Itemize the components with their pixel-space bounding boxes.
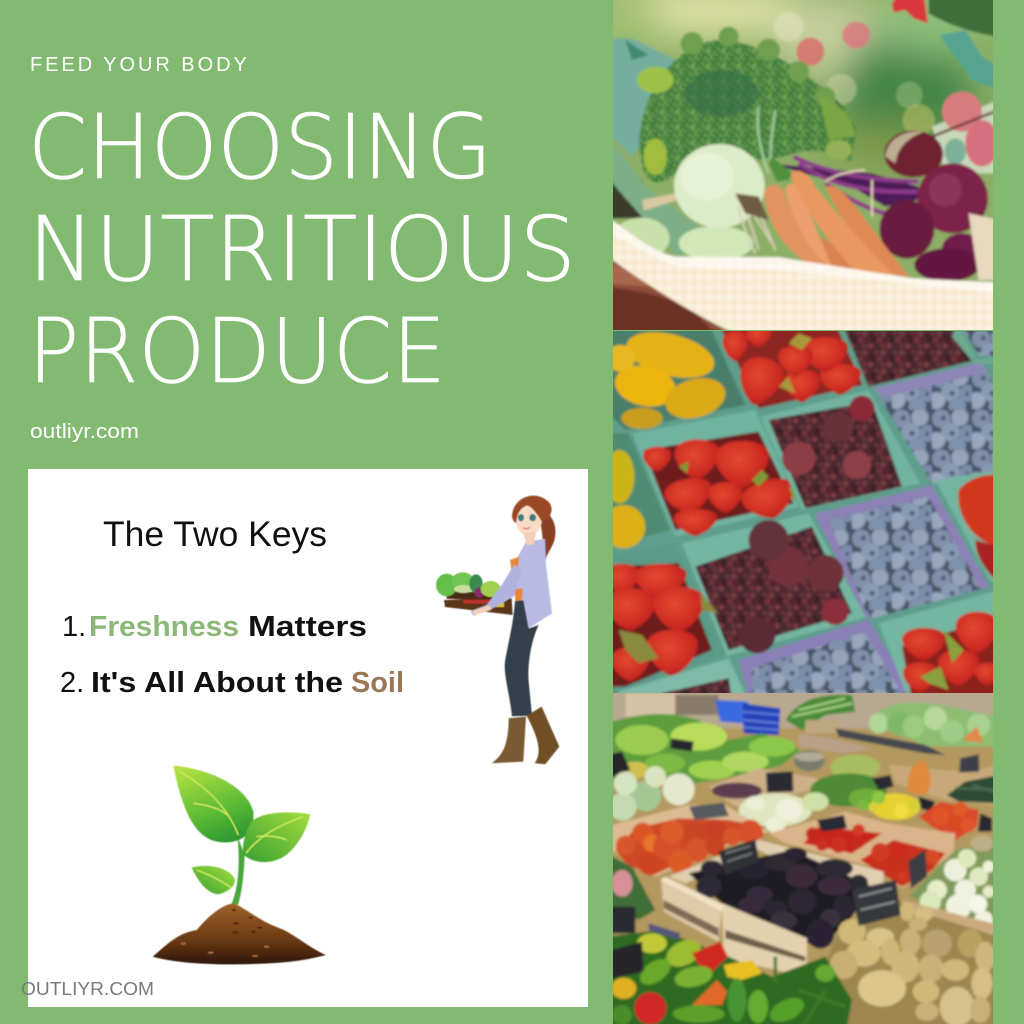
right crates — [889, 765, 999, 807]
carrot stems — [769, 157, 792, 182]
fennel white — [739, 793, 812, 827]
title: CHOOSING — [28, 95, 492, 199]
basket: blackberries top — [844, 331, 972, 388]
cauliflowers — [663, 773, 695, 805]
list item 1: 1. — [62, 611, 86, 643]
radishes and left greens — [605, 853, 655, 920]
soil mound — [153, 903, 326, 964]
lettuce — [605, 714, 800, 783]
back shelf and signs — [835, 728, 945, 755]
apples — [932, 100, 999, 173]
peppers — [605, 930, 852, 1024]
top-right foliage — [929, 0, 999, 37]
photo: baskets of berries — [613, 331, 993, 693]
photo: market stall — [613, 693, 993, 1024]
onion — [674, 144, 765, 228]
cabbages back — [869, 702, 999, 747]
chalk signs: right — [959, 754, 979, 773]
icon: woman carrying vegetable crate — [436, 496, 559, 764]
basket: bottom teal — [618, 658, 746, 693]
crates mid back — [709, 768, 819, 807]
back wall — [613, 693, 993, 730]
beets — [884, 131, 943, 177]
icon: seedling in soil — [153, 766, 326, 964]
pumpkin — [907, 760, 930, 794]
carrot tops foliage — [639, 40, 856, 182]
basket: blackberries bottom — [682, 513, 866, 656]
basket: strawberry right — [936, 470, 993, 582]
chalk sign: lettuce — [670, 738, 694, 752]
tomato crate left — [605, 805, 769, 877]
wood tray — [613, 259, 728, 330]
onion roots — [735, 197, 775, 253]
list item 2: 2. — [60, 667, 84, 699]
sign: potato — [852, 880, 901, 926]
cucumbers — [947, 775, 999, 803]
basket: blueberries top right — [876, 372, 993, 485]
eggplants — [689, 850, 872, 943]
crate: eggplants rim — [669, 840, 884, 897]
beet stems — [769, 163, 919, 207]
potatoes — [825, 900, 999, 1024]
red tomato crate — [769, 812, 955, 888]
cloth — [613, 219, 993, 330]
title — [28, 95, 576, 403]
bottom onions — [619, 216, 672, 253]
sign: tall — [908, 849, 927, 888]
list item 2 — [60, 667, 404, 699]
basket: blackberries middle — [760, 390, 920, 510]
limes and lemons — [849, 788, 882, 808]
bowl — [794, 750, 825, 771]
leeks — [785, 695, 855, 730]
leaf: small — [192, 866, 235, 894]
grapes — [830, 755, 880, 780]
greens — [810, 773, 887, 807]
basket: blueberries bottom — [738, 618, 907, 693]
basket: yellow tomatoes — [613, 331, 746, 430]
list item 2: Soil — [351, 667, 404, 699]
list item 2: It's All About the — [91, 667, 343, 699]
title: PRODUCE — [28, 299, 446, 403]
panel heading: The Two Keys — [103, 515, 327, 554]
basket: yellow tomatoes left — [613, 433, 670, 537]
sign: peppers — [605, 942, 644, 980]
basket: strawberries middle — [632, 410, 799, 537]
leek leaves — [613, 37, 676, 157]
title: NUTRITIOUS — [28, 197, 576, 301]
blue baskets — [715, 700, 749, 723]
sign: grey — [689, 803, 729, 820]
list item 1 — [62, 611, 367, 643]
stem — [232, 837, 245, 905]
basket: blueberries middle — [828, 496, 984, 620]
leaf: right — [243, 812, 310, 862]
basket: strawberries bottom left — [605, 543, 726, 700]
onions white — [909, 840, 999, 933]
photo: vegetable basket — [613, 0, 993, 330]
red flower — [892, 0, 928, 23]
website link: outliyr.com — [30, 421, 139, 443]
carton rim top — [950, 331, 993, 364]
list item 1: Freshness — [89, 611, 239, 643]
carton base — [613, 331, 993, 693]
basket: strawberries bottom right — [879, 591, 993, 693]
crates wooden front — [661, 878, 722, 942]
sign: eggplant — [719, 839, 759, 875]
right tomatoes — [919, 802, 979, 840]
chalk sign: center — [766, 771, 793, 793]
panel: the two keys — [28, 469, 588, 1007]
basket: strawberries top — [719, 323, 863, 408]
leek stems — [613, 142, 698, 256]
dark left band — [613, 180, 643, 220]
stem of beet — [932, 110, 999, 137]
list item 1: Matters — [248, 611, 367, 643]
leaf: large — [173, 766, 253, 842]
carrots — [819, 236, 853, 270]
watermark: OUTLIYR.COM — [21, 979, 154, 999]
heading: feed your body: FEED YOUR BODY — [30, 54, 250, 76]
